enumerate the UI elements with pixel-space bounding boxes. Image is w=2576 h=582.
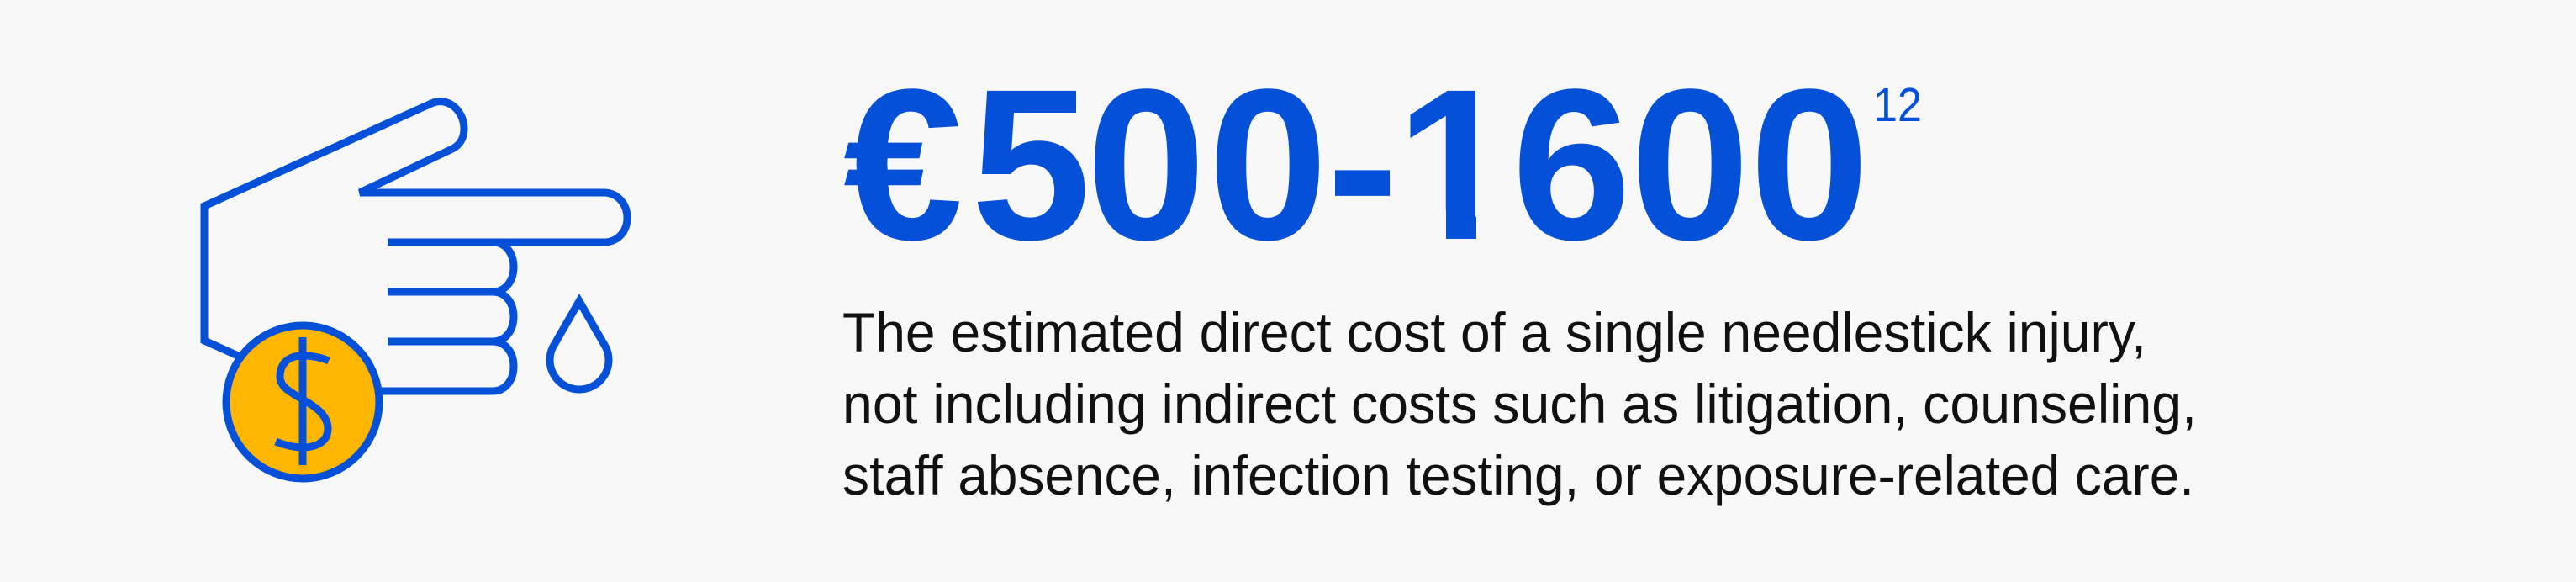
curled fingers xyxy=(378,242,514,391)
description line 2: not including indirect costs such as litigation, counseling, xyxy=(842,373,2197,435)
hand outline with thumb and index finger xyxy=(204,102,627,356)
icon: blood drop xyxy=(550,301,609,389)
description line 3: staff absence, infection testing, or exposure-related care. xyxy=(842,444,2194,506)
icon: hand with blood drop and coin xyxy=(204,102,627,479)
icon: dollar coin xyxy=(226,325,379,479)
description text xyxy=(842,301,2197,506)
description line 1: The estimated direct cost of a single needlestick injury, xyxy=(842,301,2146,363)
headline figure: €500-1600 xyxy=(843,45,1869,285)
footnote references: 12 xyxy=(1873,78,1922,132)
